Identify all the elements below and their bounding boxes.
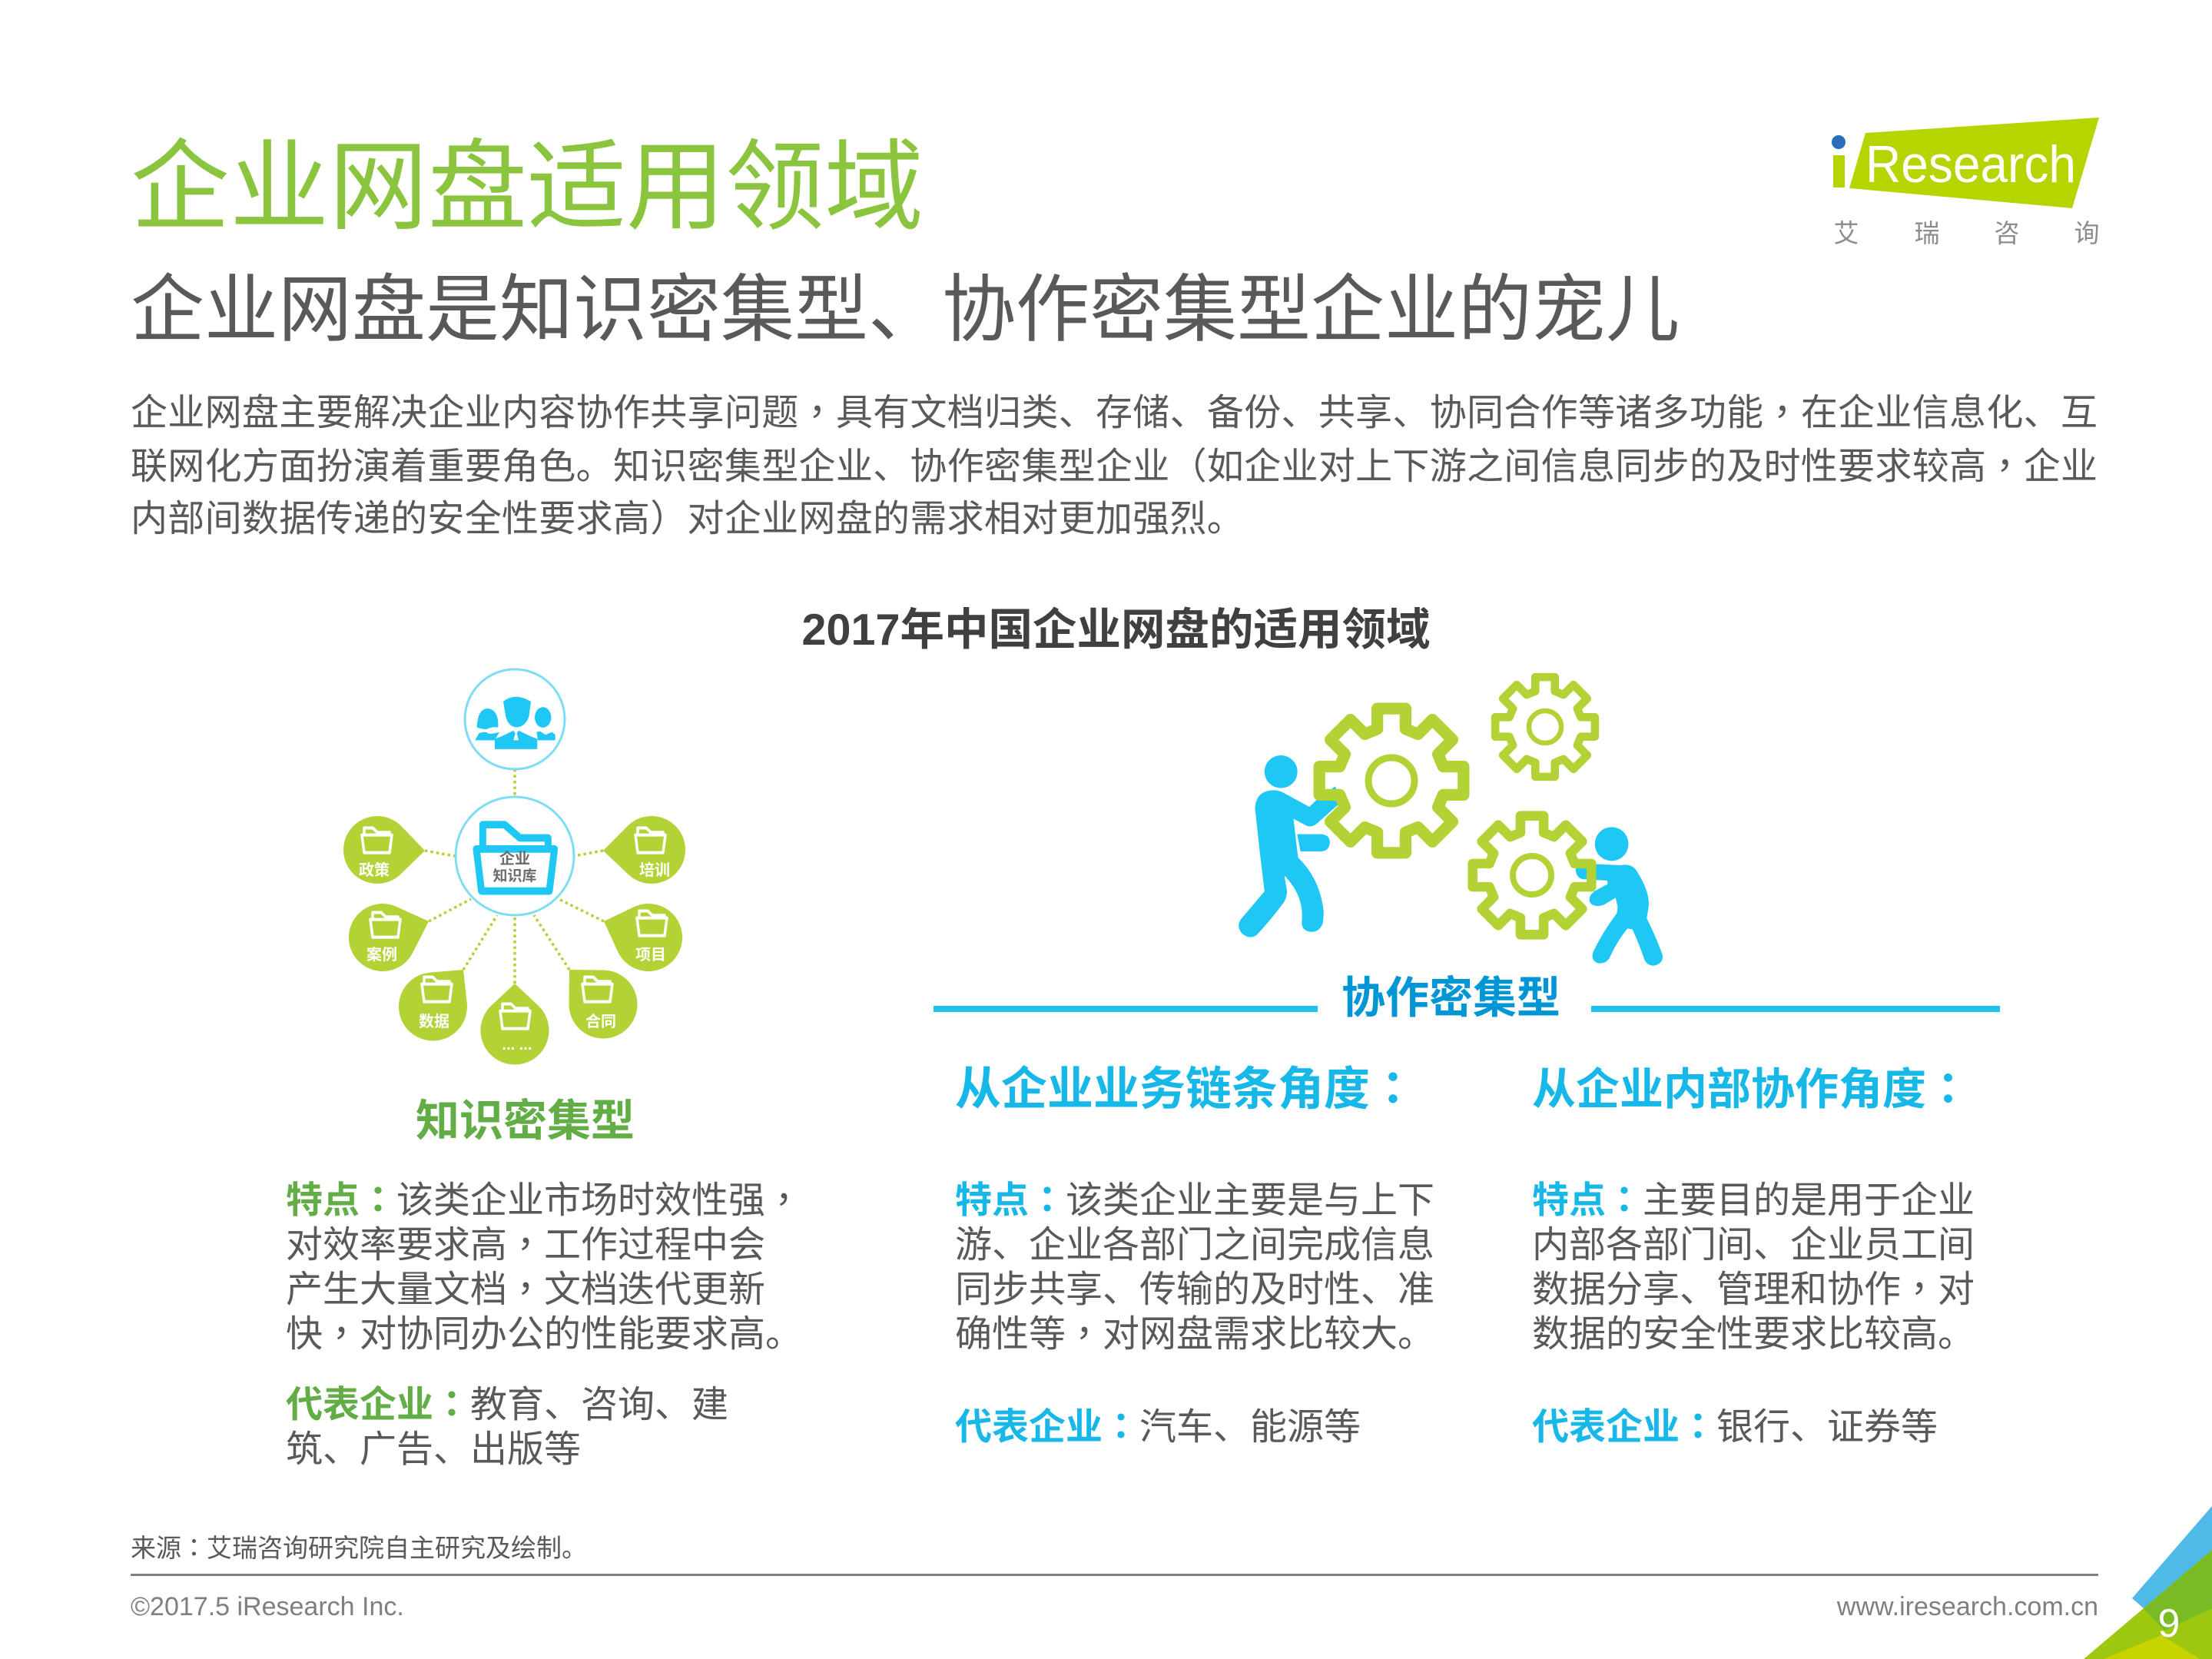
intro paragraph: 企业网盘主要解决企业内容协作共享问题，具有文档归类、存储、备份、共享、协同合作等诸多功能，在企业信息化、互 bbox=[131, 382, 2098, 436]
right person bbox=[1576, 827, 1663, 966]
heading: 知识密集型: 知识密集型 bbox=[416, 1097, 635, 1146]
text: business chain features: 游、企业各部门之间完成信息 bbox=[955, 1225, 1434, 1266]
chart title: 2017年中国企业网盘的适用领域 bbox=[802, 606, 1430, 655]
copyright: ©2017.5 iResearch Inc. bbox=[131, 1592, 404, 1621]
heading rule left bbox=[934, 1006, 1318, 1012]
text: business chain companies: 代表企业：汽车、能源等 bbox=[955, 1396, 1361, 1450]
text: internal collaboration features: 特点：主要目的是用于企业 bbox=[1532, 1170, 1975, 1223]
text: internal collaboration features bbox=[1532, 1170, 1975, 1355]
node: 案例: 案例 bbox=[366, 942, 397, 964]
node: 培训: 培训 bbox=[639, 858, 670, 880]
subheading: internal collaboration: 从企业内部协作角度： bbox=[1532, 1054, 1970, 1117]
text: knowledge-intensive representative companies: 筑、广告、出版等 bbox=[286, 1429, 581, 1470]
top-right gear bbox=[1495, 677, 1595, 777]
icon: central folder: 企业 bbox=[499, 846, 530, 868]
node: 政策 bbox=[343, 816, 425, 884]
logo: iResearch bbox=[1832, 118, 2099, 250]
footer rule bbox=[131, 1574, 2098, 1576]
text: knowledge-intensive features: 对效率要求高，工作过程中会 bbox=[286, 1214, 765, 1268]
source note: 来源：艾瑞咨询研究院自主研究及绘制。 bbox=[131, 1528, 587, 1564]
text: internal collaboration features: 内部各部门间、企业员工间 bbox=[1532, 1225, 1975, 1266]
logo: iResearch: 询 bbox=[2074, 213, 2099, 250]
icon: central folder bbox=[456, 797, 574, 915]
text: internal collaboration features: 数据分享、管理和协作，对 bbox=[1532, 1259, 1975, 1312]
text: knowledge-intensive representative companies bbox=[286, 1374, 728, 1470]
left person bbox=[1239, 755, 1341, 937]
intro paragraph: 内部间数据传递的安全性要求高）对企业网盘的需求相对更加强烈。 bbox=[131, 488, 1244, 542]
text: business chain features: 同步共享、传输的及时性、准 bbox=[955, 1269, 1434, 1310]
node: 数据 bbox=[399, 970, 467, 1040]
subtitle: 企业网盘是知识密集型、协作密集型企业的宠儿 bbox=[131, 269, 1680, 351]
node: 合同: 合同 bbox=[585, 1009, 616, 1031]
intro paragraph bbox=[131, 382, 2098, 542]
lower gear bbox=[1473, 816, 1591, 934]
node: 案例 bbox=[349, 904, 429, 971]
intro paragraph: 联网化方面扮演着重要角色。知识密集型企业、协作密集型企业（如企业对上下游之间信息同步的及时性要求较高，企业 bbox=[131, 436, 2098, 489]
node: 合同 bbox=[569, 970, 638, 1039]
text: internal collaboration features: 数据的安全性要求比较高。 bbox=[1532, 1314, 1975, 1355]
text: business chain features: 特点：该类企业主要是与上下 bbox=[955, 1170, 1434, 1223]
node: more: ... ... bbox=[502, 1037, 532, 1053]
text: internal collaboration companies: 代表企业：银行、证券等 bbox=[1532, 1396, 1938, 1450]
dotted connectors bbox=[425, 769, 604, 984]
subheading: business chain: 从企业业务链条角度： bbox=[955, 1052, 1416, 1119]
text: knowledge-intensive features: 产生大量文档，文档迭代更新 bbox=[286, 1259, 765, 1312]
text: business chain features: 确性等，对网盘需求比较大。 bbox=[955, 1303, 1434, 1357]
large gear bbox=[1319, 708, 1464, 853]
logo: iResearch: 瑞 bbox=[1915, 213, 1939, 250]
heading: 协作密集型: 协作密集型 bbox=[1341, 974, 1560, 1023]
node: 项目: 项目 bbox=[635, 942, 666, 964]
title: 企业网盘适用领域 bbox=[131, 132, 924, 243]
node: 培训 bbox=[603, 816, 685, 884]
text: knowledge-intensive representative companies: 代表企业：教育、咨询、建 bbox=[286, 1374, 728, 1428]
logo: iResearch: 艾 bbox=[1833, 213, 1859, 250]
knowledge library diagram bbox=[343, 669, 685, 1065]
icon: people circle bbox=[465, 669, 565, 769]
text: knowledge-intensive features bbox=[286, 1170, 802, 1357]
text: business chain features bbox=[955, 1170, 1434, 1357]
illustration: people turning gears bbox=[1239, 673, 1663, 966]
website: www.iresearch.com.cn bbox=[1837, 1592, 2098, 1621]
icon: central folder: 知识库 bbox=[492, 864, 537, 885]
node: 项目 bbox=[604, 904, 682, 971]
corner decoration with page number: 9 bbox=[2158, 1601, 2180, 1646]
logo: iResearch: Research bbox=[1865, 135, 2076, 194]
heading rule right bbox=[1591, 1006, 2000, 1012]
text: knowledge-intensive features: 快，对协同办公的性能要求高。 bbox=[286, 1303, 802, 1357]
text: knowledge-intensive features: 特点：该类企业市场时效性强， bbox=[286, 1170, 802, 1223]
logo: iResearch: 咨 bbox=[1995, 213, 2019, 250]
node: 数据: 数据 bbox=[419, 1009, 449, 1031]
node: 政策: 政策 bbox=[359, 858, 390, 880]
node: more bbox=[481, 984, 549, 1065]
